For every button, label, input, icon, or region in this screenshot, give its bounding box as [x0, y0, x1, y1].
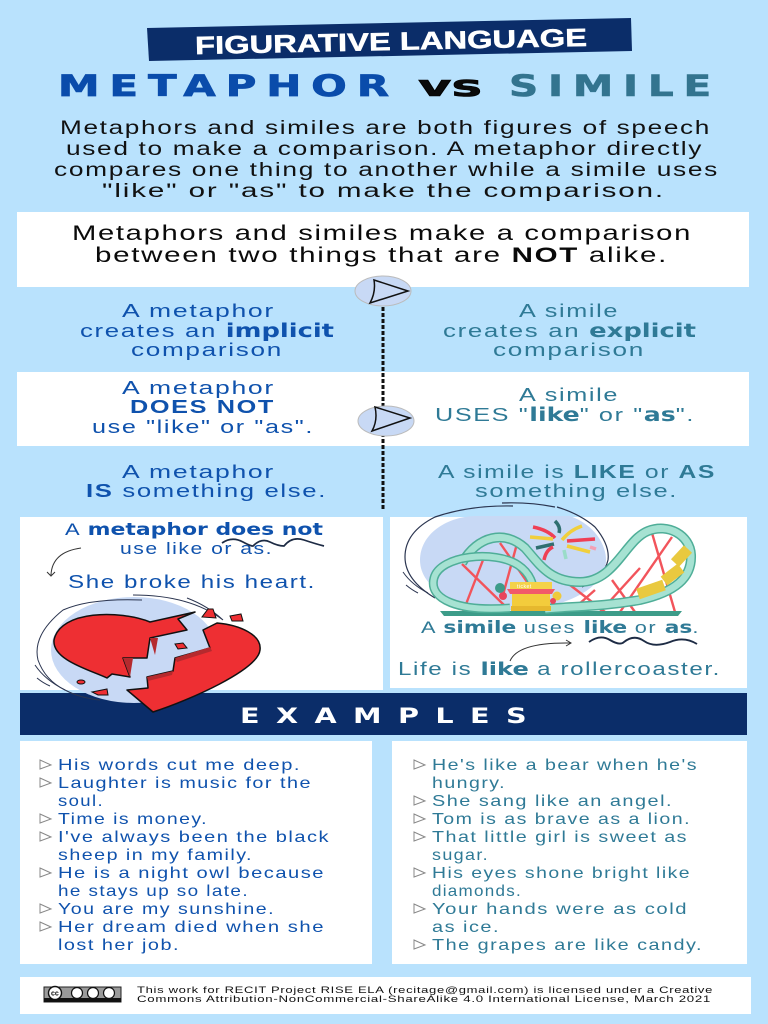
- curved arrow: [510, 640, 571, 661]
- icon: creative commons badge: cc: [51, 990, 59, 998]
- panel: metaphor example list: Time is money.: [58, 811, 208, 828]
- title banner: figurative language: [147, 18, 632, 61]
- panel: simile example list: She sang like an angel.: [432, 793, 673, 810]
- panel: simile example list: He's like a bear when he's: [432, 757, 698, 774]
- intro paragraph: [54, 118, 719, 202]
- text: simile is like something else: something else.: [475, 480, 678, 501]
- panel: shared definition: Metaphors and similes make a comparison: [72, 222, 692, 245]
- heading: metaphor vs simile: vs: [418, 69, 482, 103]
- footer: license: Commons Attribution-NonCommercial-ShareAlike 4.0 International License, March 2021: [137, 994, 711, 1005]
- panel: metaphor example list: Laughter is music for the: [58, 775, 312, 792]
- text: metaphor does not use like or as: DOES NOT: [130, 396, 275, 417]
- illustration: broken heart: [35, 595, 260, 712]
- section band: examples: EXAMPLES: [240, 704, 543, 728]
- panel: simile example list: His eyes shone bright like: [432, 865, 691, 882]
- text: metaphor is something else: IS something else.: [86, 480, 327, 501]
- panel: metaphor example list: lost her job.: [58, 937, 180, 954]
- panel: metaphor example list: He is a night owl because: [58, 865, 325, 882]
- panel: simile example list: The grapes are like candy.: [432, 937, 703, 954]
- squiggle underline: [222, 539, 324, 546]
- intro paragraph: used to make a comparison. A metaphor directly: [66, 139, 703, 160]
- panel: simile example list: Your hands were as cold: [432, 901, 688, 918]
- panel: simile example list: Tom is as brave as a lion.: [432, 811, 691, 828]
- text: metaphor implicit: [80, 300, 334, 360]
- illustration: rollercoaster: ticket: [517, 584, 532, 590]
- bullets: [414, 760, 425, 949]
- panel: metaphor example list: sheep in my family.: [58, 847, 253, 864]
- text: metaphor implicit: A metaphor: [122, 300, 275, 321]
- panel: simile example list: That little girl is sweet as: [432, 829, 688, 846]
- heading: metaphor vs simile: METAPHOR: [58, 69, 399, 103]
- panel: metaphor example list: Her dream died when she: [58, 919, 325, 936]
- panel: metaphor example: A metaphor does not: [65, 520, 323, 540]
- panel: simile example: Life is like a rollercoaster.: [398, 659, 721, 680]
- text: metaphor is something else: A metaphor: [122, 461, 275, 482]
- text: metaphor implicit: creates an implicit: [80, 320, 334, 342]
- text: metaphor does not use like or as: use "like" or "as".: [92, 416, 314, 437]
- text: simile is like something else: [438, 461, 716, 501]
- curved arrow: [47, 548, 81, 576]
- icon: creative commons badge: [44, 986, 121, 1002]
- text: simile explicit: comparison: [493, 339, 645, 360]
- panel: does not / uses band: [17, 372, 749, 446]
- panel: simile example list: hungry.: [432, 775, 506, 792]
- panel: metaphor example list: His words cut me deep.: [58, 757, 301, 774]
- panel: simile example list: as ice.: [432, 919, 500, 936]
- text: simile uses like or as: [435, 384, 695, 426]
- title banner: figurative language: FIGURATIVE LANGUAGE: [195, 24, 587, 60]
- intro paragraph: Metaphors and similes are both figures of speech: [60, 118, 711, 139]
- text: simile uses like or as: USES " like " or " as ".: [435, 404, 695, 426]
- text: simile explicit: creates an explicit: [443, 320, 696, 342]
- panel: metaphor example list: he stays up so late.: [58, 883, 249, 900]
- text: metaphor implicit: comparison: [131, 339, 283, 360]
- text: metaphor does not use like or as: [92, 377, 314, 437]
- panel: metaphor example list: I've always been the black: [58, 829, 330, 846]
- icon: triangle middle: [358, 406, 414, 436]
- panel: shared definition: between two things that are NOT alike.: [95, 244, 668, 267]
- panel: shared definition: [17, 212, 749, 287]
- footer: license: [20, 977, 751, 1014]
- panel: simile example: A simile uses like or as .: [421, 618, 700, 638]
- bullets: [40, 760, 51, 931]
- text: metaphor does not use like or as: A metaphor: [122, 377, 275, 398]
- text: simile explicit: [443, 300, 696, 360]
- panel: metaphor example: She broke his heart.: [68, 572, 316, 592]
- squiggle underline: [589, 637, 697, 645]
- panel: metaphor example list: You are my sunshine.: [58, 901, 275, 918]
- text: metaphor is something else: [86, 461, 327, 501]
- footer: license: This work for RECIT Project RISE ELA (recitage@gmail.com) is licensed under a Creative: [137, 985, 713, 996]
- text: simile is like something else: A simile is LIKE or AS: [438, 461, 716, 482]
- heading: metaphor vs simile: [58, 69, 721, 103]
- panel: metaphor example list: [20, 741, 372, 964]
- panel: simile example list: sugar.: [432, 847, 489, 864]
- centre dashed divider: [382, 307, 384, 510]
- section band: examples: [20, 693, 747, 735]
- intro paragraph: compares one thing to another while a simile uses: [54, 160, 719, 181]
- panel: metaphor example list: soul.: [58, 793, 104, 810]
- panel: metaphor example: use like or as.: [120, 539, 273, 558]
- icon: triangle top: [355, 276, 411, 306]
- intro paragraph: "like" or "as" to make the comparison.: [102, 181, 665, 202]
- illustration: rollercoaster: [403, 503, 691, 616]
- text: simile explicit: A simile: [519, 300, 619, 321]
- panel: simile example list: diamonds.: [432, 883, 522, 900]
- heading: metaphor vs simile: SIMILE: [509, 69, 721, 103]
- panel: metaphor example: [20, 517, 383, 690]
- panel: simile example list: [392, 741, 747, 964]
- text: simile uses like or as: A simile: [519, 384, 619, 405]
- panel: simile example: [390, 517, 747, 688]
